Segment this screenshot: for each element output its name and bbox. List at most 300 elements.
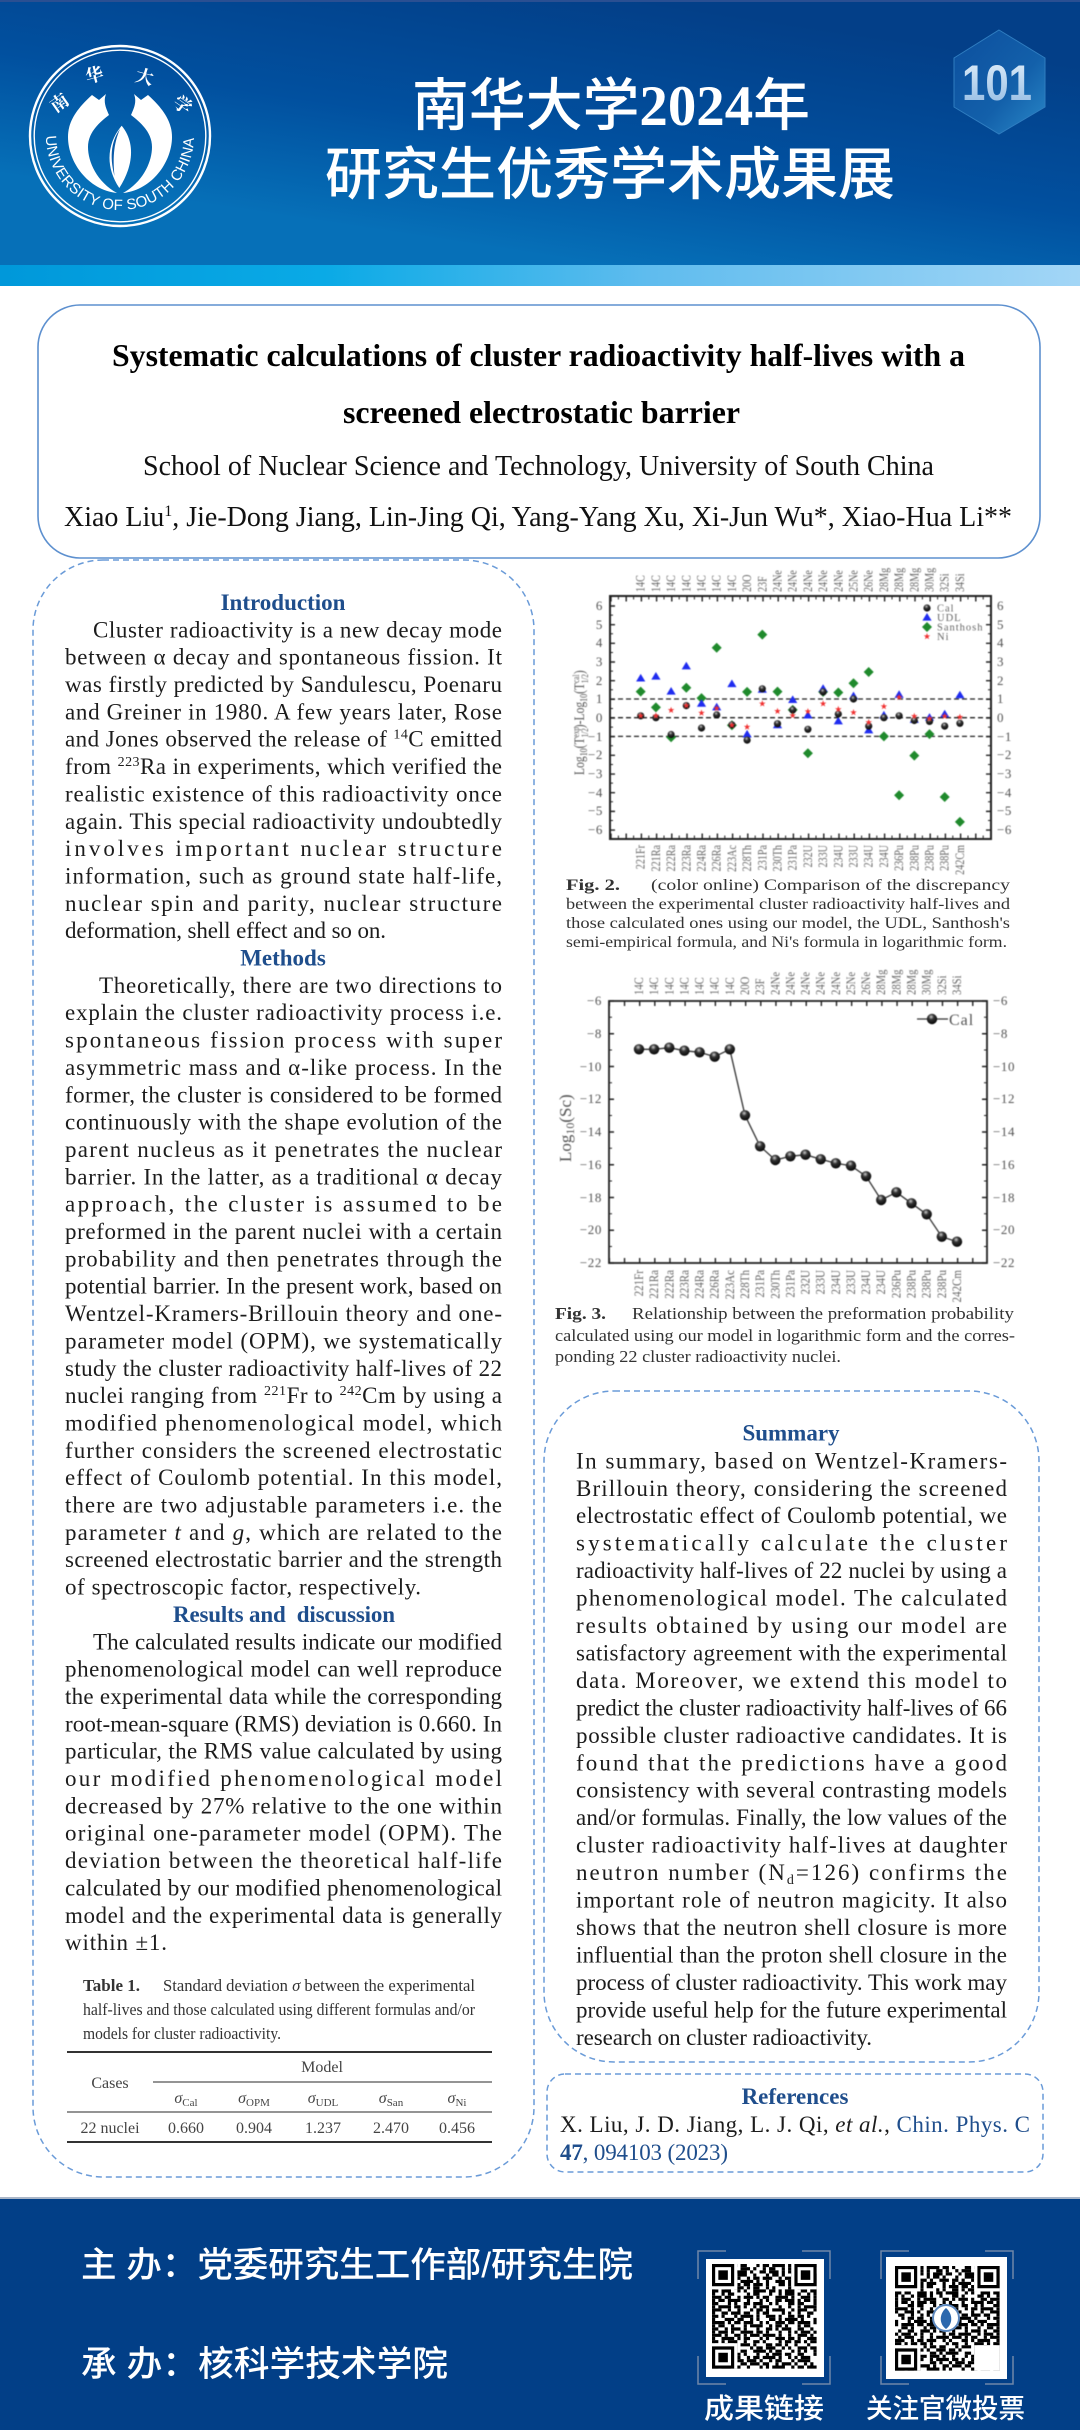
bottom nuclei labels: 222Ra [664, 845, 678, 871]
chart: Fig. 2 discrepancy scatter: 0 [997, 710, 1004, 725]
bottom nuclei labels: 236Pu [889, 1270, 904, 1298]
table 1: Cal [182, 2097, 198, 2109]
y axis ticks: −12 [580, 1091, 602, 1106]
y axis ticks: 2 [596, 673, 603, 688]
bottom nuclei labels: 230Th [767, 1270, 783, 1299]
text block: introduction: information, such as ground state half-life, [65, 864, 502, 888]
caption: Fig. 2: those calculated ones using our model, the UDL, Santhosh's [566, 915, 1010, 932]
bottom nuclei labels: 232U [801, 844, 815, 868]
badge: 101 [954, 30, 1045, 134]
text block: summary: and/or formulas. Finally, the low values of the [576, 1805, 1007, 1830]
main title [325, 75, 895, 207]
text block: summary [576, 1448, 1008, 2050]
authors: Xiao Liu [64, 502, 164, 533]
top cluster labels: 25Ne [843, 972, 858, 995]
text block: methods: parent nucleus as it penetrates the nuclear [65, 1137, 502, 1162]
table 1: 1.237 [305, 2120, 341, 2137]
bottom nuclei labels: 242Cm [953, 845, 967, 875]
text block: results: The calculated results indicate our modified [93, 1629, 502, 1654]
top cluster labels: 23F [752, 978, 767, 995]
table 1: σ [448, 2090, 457, 2107]
authors: , Jie-Dong Jiang, Lin-Jing Qi, Yang-Yang Xu, Xi-Jun Wu*, Xiao-Hua Li** [172, 502, 1012, 533]
heading: results and discussion: Results and discussion [173, 1602, 395, 1627]
bottom nuclei labels: 234U [858, 1270, 873, 1295]
top cluster labels: 32Si [934, 975, 949, 995]
chart: Fig. 3 preformation probability line: −14 [993, 1124, 1015, 1139]
table 1: σ [174, 2090, 183, 2107]
chart: Fig. 3 preformation probability line: −12 [993, 1091, 1015, 1106]
top cluster labels: 14C [725, 575, 739, 592]
y axis ticks [588, 598, 603, 837]
QR code: follow WeChat vote [881, 2251, 1013, 2384]
main title: 研究生优秀学术成果展 [325, 144, 895, 207]
light blue stripe [0, 265, 1080, 286]
y axis ticks: −3 [588, 766, 603, 781]
text block: methods: Wentzel-Kramers-Brillouin theory and one- [65, 1301, 502, 1326]
chart: Fig. 2 discrepancy scatter: 3 [997, 654, 1004, 669]
top cluster labels: 14C [692, 977, 707, 995]
table 1 [67, 1976, 492, 2142]
bottom nuclei labels: 231Pa [783, 1269, 798, 1298]
legend: Cal [937, 604, 955, 614]
table 1: Model [301, 2059, 343, 2076]
paper title [112, 337, 965, 430]
top cluster labels: 24Ne [831, 570, 846, 592]
y axis ticks: −6 [588, 822, 603, 837]
bottom nuclei labels: 223Ra [677, 1269, 692, 1299]
text block: results: model and the experimental data is generally [65, 1903, 502, 1928]
bottom nuclei labels: 236Pu [892, 845, 906, 871]
panel: summary [544, 1391, 1039, 2062]
text block: methods: modified phenomenological model, which [65, 1410, 502, 1436]
chart: Fig. 3 preformation probability line: −6 [993, 993, 1008, 1008]
top cluster labels: 14C [631, 977, 646, 995]
text block: introduction: again. This special radioactivity undoubtedly [65, 809, 502, 834]
bottom nuclei labels: 233U [813, 1270, 828, 1295]
bottom nuclei labels: 238Pu [922, 845, 937, 871]
paper title: Systematic calculations of cluster radioactivity half-lives with a [112, 337, 965, 373]
bottom nuclei labels: 242Cm [949, 1269, 964, 1303]
top cluster labels: 20O [737, 976, 752, 995]
top cluster labels: 24Ne [782, 972, 798, 995]
text block: methods: of spectroscopic factor, respectively. [65, 1575, 421, 1600]
top cluster labels: 14C [679, 575, 694, 592]
QR label: 成果链接: 成果链接 [704, 2393, 824, 2424]
text block: summary: process of cluster radioactivity. This work may [576, 1970, 1008, 1995]
panel: left column [33, 560, 534, 2177]
text block: introduction: was firstly predicted by Sandulescu, Poenaru [65, 672, 502, 697]
bottom nuclei labels: 234U [862, 844, 876, 868]
top cluster labels: 25Ne [846, 570, 861, 592]
chart: Fig. 2 discrepancy scatter: 4 [997, 635, 1004, 650]
top cluster labels: 28Mg [873, 970, 888, 995]
top cluster labels: 28Mg [888, 970, 904, 995]
y axis label: 10 [578, 748, 589, 756]
text block: summary: Brillouin theory, considering the screened [576, 1476, 1008, 1501]
text block: results: phenomenological model can well reproduce [65, 1657, 502, 1682]
text block: summary: consistency with several contrasting models [576, 1778, 1007, 1803]
caption: Fig. 2: semi-empirical formula, and Ni's formula in logarithmic form. [566, 934, 1007, 951]
text block: summary: results obtained by using our model are [576, 1613, 1007, 1638]
text block: introduction: 14 [393, 728, 408, 743]
chart: Fig. 3 preformation probability line: −8 [993, 1026, 1008, 1041]
section: methods [65, 946, 502, 1600]
y axis ticks: −1 [588, 729, 603, 744]
text block: methods: further considers the screened electrostatic [65, 1438, 502, 1463]
text block: summary: provide useful help for the future experimental [576, 1997, 1007, 2022]
text block: summary: important role of neutron magicity. It also [576, 1888, 1007, 1912]
text block: summary: predict the cluster radioactivity half-lives of 66 [576, 1695, 1007, 1720]
chart: Fig. 2 discrepancy scatter: −6 [997, 822, 1012, 837]
text block: introduction: C emitted [408, 727, 502, 752]
table 1: 0.660 [168, 2120, 204, 2137]
y axis label: (Sc) [556, 1094, 575, 1123]
top cluster labels: 23F [755, 576, 770, 592]
co-organizer line: 承 办：核科学技术学院 [81, 2345, 448, 2384]
paper title: screened electrostatic barrier [343, 394, 740, 430]
text block: methods: screened electrostatic barrier and the strength [65, 1547, 502, 1572]
bottom nuclei labels: 223Ac [722, 1270, 737, 1299]
top cluster labels: 30Mg [922, 568, 937, 592]
bottom nuclei labels: 233U [816, 844, 830, 868]
text block: methods: barrier. In the latter, as a traditional α decay [65, 1164, 502, 1189]
text block: results: decreased by 27% relative to the one within [65, 1793, 502, 1818]
y axis ticks: −10 [580, 1059, 602, 1074]
text block: summary: shows that the neutron shell closure is more [576, 1915, 1007, 1940]
bottom nuclei labels: 234U [828, 1270, 843, 1295]
text block: methods: Theoretically, there are two directions to [99, 973, 502, 998]
chart: Fig. 3 preformation probability line [556, 970, 1015, 1303]
text block: methods: Fr to [287, 1383, 339, 1408]
table 1: σ [379, 2090, 388, 2107]
y axis label: Log [571, 756, 587, 775]
reference text: 47, 094103 (2023) [560, 2140, 728, 2165]
text block: summary: possible cluster radioactive candidates. It is [576, 1723, 1007, 1748]
y axis label: (T [571, 737, 587, 748]
heading: summary: Summary [742, 1421, 840, 1446]
y axis ticks: −18 [580, 1190, 602, 1205]
top cluster labels: 20O [740, 575, 754, 592]
text block: introduction: from [65, 754, 111, 779]
y axis label: 10 [578, 693, 589, 702]
caption: Fig. 3: Relationship between the preformation probability [632, 1304, 1015, 1323]
top cluster labels: 14C [710, 575, 724, 592]
top cluster labels: 24Ne [801, 570, 815, 592]
caption: Fig. 3: ponding 22 cluster radioactivity nuclei. [555, 1347, 841, 1366]
bottom nuclei labels: 231Pa [786, 845, 800, 870]
bottom nuclei labels: 226Ra [707, 1269, 722, 1299]
text block: methods: parameter model (OPM), we systematically [65, 1328, 502, 1353]
text block: methods [65, 973, 502, 1600]
caption: Fig. 3: calculated using our model in logarithmic form and the corres- [555, 1326, 1015, 1345]
top cluster labels: 24Ne [770, 570, 785, 592]
bottom nuclei labels: 224Ra [694, 845, 709, 871]
bottom nuclei labels: 223Ac [725, 845, 739, 872]
plot frame and ticks [610, 596, 991, 839]
chart: Fig. 2 discrepancy scatter: 2 [997, 673, 1004, 688]
text block: introduction: 223 [118, 755, 140, 770]
top cluster labels: 32Si [938, 573, 952, 592]
reference text [560, 2112, 1030, 2165]
text block: summary: systematically calculate the cluster [576, 1531, 1007, 1556]
y axis ticks: 4 [596, 635, 603, 650]
text block: methods: explain the cluster radioactivity process i.e. [65, 1000, 502, 1025]
header banner [0, 0, 1080, 286]
bottom nuclei labels: 238Pu [919, 1270, 934, 1298]
text block: methods: Cm by using a [362, 1383, 502, 1408]
affiliation: School of Nuclear Science and Technology, University of South China [143, 451, 935, 482]
bottom nuclei labels: 238Pu [907, 845, 922, 871]
plot frame and ticks [609, 1000, 987, 1264]
bottom nuclei labels: 232U [798, 1270, 813, 1295]
text block: summary: neutron number (N [576, 1860, 785, 1885]
top cluster labels [631, 970, 964, 995]
chart: Fig. 2 discrepancy scatter: −5 [997, 803, 1012, 818]
chart: Fig. 2 discrepancy scatter: 1 [997, 691, 1004, 706]
table 1: UDL [316, 2097, 339, 2109]
top cluster labels: 34Si [949, 975, 964, 995]
top cluster labels: 14C [676, 977, 692, 995]
top cluster labels: 14C [722, 977, 737, 995]
text block: summary: satisfactory agreement with the experimental [576, 1640, 1007, 1666]
y axis ticks: 3 [596, 654, 603, 669]
text block: introduction: realistic existence of this radioactivity once [65, 781, 502, 806]
table 1: Ni [455, 2097, 466, 2109]
chart: Fig. 2 discrepancy scatter: −4 [997, 785, 1012, 800]
text block: summary: found that the predictions have a good [576, 1750, 1008, 1775]
chart: Fig. 3 preformation probability line: −16 [993, 1157, 1015, 1172]
y axis label: exp [571, 727, 581, 737]
y axis label: ) [571, 670, 587, 674]
y axis label: Log [556, 1135, 575, 1162]
text block: methods: former, the cluster is considered to be formed [65, 1082, 502, 1107]
table 1: σ [238, 2090, 247, 2107]
y axis ticks: 1 [596, 691, 603, 706]
text block: methods: spontaneous fission process with super [65, 1028, 502, 1053]
text block: introduction: Ra in experiments, which verified the [140, 754, 502, 779]
bottom nuclei labels: 233U [843, 1270, 858, 1295]
chart: Fig. 3 preformation probability line: −10 [993, 1059, 1015, 1074]
text block: summary: influential than the proton shell closure in the [576, 1942, 1007, 1967]
top cluster labels: 14C [646, 977, 661, 995]
top cluster labels: 14C [694, 575, 709, 592]
data line [634, 1042, 962, 1247]
logo: University of South China seal: UNIVERSITY OF SOUTH CHINA [46, 136, 194, 210]
legend [917, 1012, 974, 1029]
table 1: 0.904 [236, 2120, 272, 2137]
text block: methods: there are two adjustable parameters i.e. the [65, 1492, 502, 1518]
y axis ticks: −5 [588, 803, 603, 818]
chart: Fig. 3 preformation probability line: −18 [993, 1190, 1015, 1205]
y axis ticks: −20 [580, 1222, 602, 1237]
y axis ticks: 6 [596, 598, 603, 613]
top cluster labels: 24Ne [767, 972, 783, 995]
top cluster labels: 34Si [953, 573, 967, 592]
y axis ticks: −14 [580, 1124, 602, 1139]
section: introduction [65, 590, 503, 943]
bottom nuclei labels [631, 1269, 964, 1303]
y axis ticks [580, 993, 602, 1270]
bottom nuclei labels: 221Fr [631, 1270, 646, 1296]
y axis ticks: −22 [580, 1255, 602, 1270]
authors: 1 [164, 503, 172, 520]
y axis ticks: 5 [596, 617, 603, 632]
text block: methods: asymmetric mass and α-like process. In the [65, 1055, 502, 1080]
chart: Fig. 2 discrepancy scatter [571, 568, 1012, 875]
organizer line: 主 办：党委研究生工作部/研究生院 [81, 2246, 633, 2285]
chart: Fig. 3 preformation probability line: −20 [993, 1222, 1015, 1237]
y axis ticks: −2 [588, 747, 603, 762]
text block: introduction: between α decay and spontaneous fission. It [65, 645, 503, 670]
logo: University of South China seal [28, 44, 212, 228]
top cluster labels: 26Ne [862, 570, 876, 592]
caption: Fig. 3: Fig. 3. [555, 1304, 606, 1323]
text block: results: deviation between the theoretical half-life [65, 1848, 502, 1873]
bottom nuclei labels: 224Ra [692, 1269, 707, 1299]
text block: summary: radioactivity half-lives of 22 nuclei by using a [576, 1558, 1007, 1583]
footer band [0, 2197, 1080, 2430]
bottom nuclei labels: 238Pu [938, 845, 952, 871]
text block: results: calculated by our modified phenomenological [65, 1875, 502, 1900]
bottom nuclei labels [634, 844, 967, 875]
table 1: San [387, 2097, 404, 2109]
text block: summary: phenomenological model. The calculated [576, 1586, 1008, 1611]
bottom nuclei labels: 233U [846, 844, 861, 868]
text block: introduction: deformation, shell effect and so on. [65, 918, 386, 943]
top cluster labels: 24Ne [786, 570, 800, 592]
QR label: 关注官微投票: 关注官微投票 [866, 2394, 1025, 2424]
text block: methods: 221 [264, 1384, 286, 1399]
bottom nuclei labels: 238Pu [904, 1270, 919, 1298]
text block: summary: electrostatic effect of Coulomb potential, we [576, 1503, 1007, 1528]
y axis label: 10 [563, 1123, 577, 1135]
bottom nuclei labels: 234U [873, 1270, 888, 1295]
top cluster labels: 24Ne [816, 570, 830, 592]
text block: results: root-mean-square (RMS) deviation is 0.660. In [65, 1711, 502, 1736]
y axis ticks: −16 [580, 1157, 602, 1172]
y axis label: (T [571, 683, 587, 694]
legend: Santhosh [937, 622, 984, 634]
text block: results: particular, the RMS value calculated by using [65, 1739, 502, 1764]
text block: results: original one-parameter model (OPM). The [65, 1821, 502, 1846]
text block: introduction: Cluster radioactivity is a new decay mode [93, 617, 502, 642]
text block: summary: data. Moreover, we extend this model to [576, 1668, 1007, 1693]
bottom nuclei labels: 231Pa [755, 845, 770, 870]
chart: Fig. 2 discrepancy scatter: −3 [997, 766, 1012, 781]
text block: results: our modified phenomenological model [65, 1766, 502, 1791]
heading: references: References [742, 2084, 848, 2109]
top cluster labels: 30Mg [919, 970, 934, 995]
panel: references [547, 2074, 1043, 2172]
top cluster labels: 14C [661, 977, 677, 995]
top cluster labels: 24Ne [813, 972, 828, 995]
y axis ticks: 0 [596, 710, 603, 725]
top cluster labels: 28Mg [892, 568, 906, 592]
chart: Fig. 2 discrepancy scatter: 6 [997, 598, 1004, 613]
text block: methods: continuously with the shape evolution of the [65, 1110, 502, 1135]
title panel [38, 305, 1040, 558]
heading: methods: Methods [240, 946, 326, 970]
chart: Fig. 2 discrepancy scatter: −1 [997, 729, 1012, 744]
bottom nuclei labels: 221Ra [646, 1269, 661, 1299]
bottom nuclei labels: 221Fr [634, 845, 648, 869]
text block: introduction: involves important nuclear structure [65, 836, 502, 861]
table caption: half-lives and those calculated using different formulas and/or [83, 2000, 475, 2019]
logo: University of South China seal: 南 [44, 86, 74, 118]
top cluster labels: 14C [634, 575, 648, 592]
top cluster labels: 24Ne [828, 972, 843, 995]
text block: methods: approach, the cluster is assumed to be [65, 1192, 502, 1217]
y axis ticks: −8 [587, 1026, 602, 1041]
text block: methods: effect of Coulomb potential. In this model, [65, 1465, 502, 1490]
bottom nuclei labels: 228Th [740, 845, 754, 871]
bottom nuclei labels: 221Ra [649, 845, 663, 871]
bottom nuclei labels: 234U [877, 844, 891, 868]
caption: Fig. 3 [555, 1304, 1015, 1366]
chart: Fig. 3 preformation probability line: −22 [993, 1255, 1015, 1270]
text block: methods: 242 [340, 1384, 362, 1399]
table 1: 22 nuclei [80, 2120, 140, 2137]
text block: results: within ±1. [65, 1930, 167, 1955]
text block: summary: cluster radioactivity half-lives at daughter [576, 1833, 1007, 1858]
y axis ticks: −6 [587, 993, 602, 1008]
text block: summary: In summary, based on Wentzel-Kramers- [576, 1448, 1007, 1473]
data markers [636, 630, 965, 827]
table caption: Table 1. [83, 1976, 140, 1995]
table 1: 2.470 [373, 2120, 409, 2137]
table caption: Standard deviation σ between the experimental [163, 1976, 475, 1995]
text block: summary: d [787, 1873, 794, 1888]
top cluster labels: 24Ne [797, 972, 813, 995]
main title: 南华大学2024年 [412, 75, 810, 138]
reference text: X. Liu, J. D. Jiang, L. J. Qi, et al., Chin. Phys. C [560, 2112, 1030, 2137]
text block: results [65, 1629, 502, 1955]
y axis label: cal [571, 674, 581, 683]
bottom nuclei labels: 238Pu [934, 1270, 949, 1298]
caption: Fig. 2: (color online) Comparison of the discrepancy [651, 877, 1010, 894]
y axis label: 1/2 [580, 728, 590, 737]
top cluster labels: 28Mg [877, 568, 891, 592]
top cluster labels: 14C [707, 977, 722, 995]
bottom nuclei labels: 231Pa [752, 1269, 767, 1298]
chart: Fig. 2 discrepancy scatter: 5 [997, 617, 1004, 632]
y axis label: 1/2 [580, 674, 590, 683]
bottom nuclei labels: 223Ra [679, 845, 694, 871]
top cluster labels: 28Mg [907, 568, 922, 592]
caption: Fig. 2: Fig. 2. [566, 877, 620, 894]
chart: Fig. 2 discrepancy scatter: −2 [997, 747, 1012, 762]
text block: summary: research on cluster radioactivity. [576, 2025, 872, 2050]
table caption [83, 1976, 475, 2043]
logo: University of South China seal: 华 [82, 59, 106, 89]
bottom nuclei labels: 226Ra [710, 845, 724, 871]
legend: Cal [949, 1012, 974, 1029]
caption: Fig. 2 [566, 877, 1010, 951]
table caption: models for cluster radioactivity. [83, 2024, 281, 2043]
legend: Ni [937, 632, 950, 643]
table 1: Cases [91, 2075, 129, 2092]
logo: University of South China seal: 大 [133, 61, 157, 91]
text block: introduction: and Greiner in 1980. A few years later, Rose [65, 699, 502, 724]
bottom nuclei labels: 230Th [770, 845, 785, 871]
text block: summary: =126) confirms the [796, 1860, 1007, 1885]
bottom nuclei labels: 234U [831, 844, 846, 868]
y axis label: )-Log [571, 701, 587, 728]
bottom nuclei labels: 222Ra [661, 1269, 677, 1299]
table 1: σ [308, 2090, 317, 2107]
y axis ticks: −4 [588, 785, 603, 800]
legend [922, 604, 984, 643]
